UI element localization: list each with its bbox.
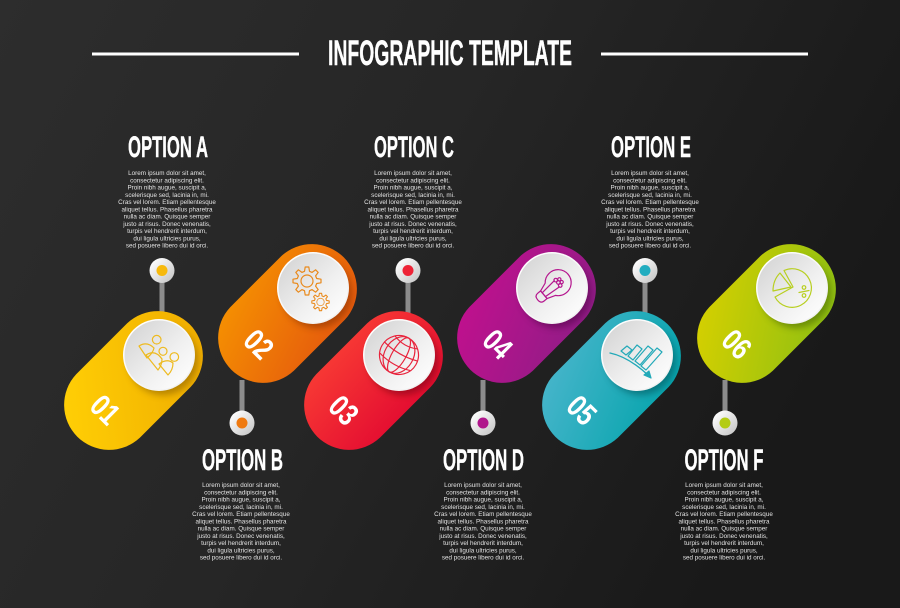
option B text: consectetur adipiscing elit.	[204, 489, 278, 496]
option A text: turpis vel hendrerit interdum,	[127, 228, 207, 235]
title rule right	[601, 52, 808, 56]
option B heading: OPTION B	[202, 444, 283, 477]
option A text: nulla ac diam. Quisque semper	[124, 214, 210, 220]
option D heading: OPTION D	[443, 444, 524, 477]
option D text: aliquet tellus. Phasellus pharetra	[437, 518, 529, 525]
option D text: scelerisque sed, lacinia in, mi.	[441, 504, 525, 511]
option E text: turpis vel hendrerit interdum,	[610, 228, 690, 235]
option B text: sed posuere libero dui id orci.	[200, 554, 282, 562]
option C text: turpis vel hendrerit interdum,	[373, 228, 453, 235]
option F text: Proin nibh augue, suscipit a,	[684, 496, 764, 504]
option A text: scelerisque sed, lacinia in, mi.	[125, 192, 209, 199]
option D text: dui ligula ultricies purus,	[449, 547, 517, 554]
capsule 02	[218, 244, 357, 383]
option F text: consectetur adipiscing elit.	[687, 489, 761, 496]
option B text: dui ligula ultricies purus,	[207, 547, 275, 554]
icon: people	[139, 335, 179, 375]
option A text: Cras vel lorem. Etiam pellentesque	[118, 199, 216, 206]
number 04: 04	[476, 322, 520, 367]
option A text: Proin nibh augue, suscipit a,	[127, 184, 207, 192]
icon: light bulb	[529, 264, 576, 310]
option C text: Cras vel lorem. Etiam pellentesque	[364, 199, 462, 206]
number 02: 02	[237, 322, 281, 366]
option F text: Cras vel lorem. Etiam pellentesque	[675, 511, 773, 518]
option C text: aliquet tellus. Phasellus pharetra	[367, 206, 459, 213]
option E text: nulla ac diam. Quisque semper	[607, 214, 693, 220]
option B text: justo at risus. Donec venenatis,	[196, 533, 285, 540]
option B text: Cras vel lorem. Etiam pellentesque	[192, 511, 290, 518]
capsule 03	[304, 311, 443, 450]
capsule 01	[64, 311, 203, 450]
option F text: Lorem ipsum dolor sit amet,	[685, 482, 763, 489]
option E text: dui ligula ultricies purus,	[616, 235, 684, 242]
option D text: justo at risus. Donec venenatis,	[438, 533, 527, 540]
option B text: nulla ac diam. Quisque semper	[198, 526, 284, 532]
option C text: Lorem ipsum dolor sit amet,	[374, 170, 452, 177]
option C text: sed posuere libero dui id orci.	[372, 242, 454, 250]
option C text: dui ligula ultricies purus,	[379, 235, 447, 242]
option F text: scelerisque sed, lacinia in, mi.	[682, 504, 766, 511]
icon: falling bar chart	[610, 345, 662, 378]
option A text: justo at risus. Donec venenatis,	[122, 221, 211, 228]
option E text: scelerisque sed, lacinia in, mi.	[608, 192, 692, 199]
option F text: nulla ac diam. Quisque semper	[681, 526, 767, 532]
option F text: justo at risus. Donec venenatis,	[679, 533, 768, 540]
capsule 06	[697, 244, 836, 383]
option C heading: OPTION C	[374, 131, 454, 164]
number 06: 06	[715, 322, 759, 366]
option D text: nulla ac diam. Quisque semper	[440, 526, 526, 532]
option E heading: OPTION E	[611, 131, 691, 164]
icon: pie chart	[773, 269, 811, 307]
option E text: sed posuere libero dui id orci.	[609, 242, 691, 250]
option E text: aliquet tellus. Phasellus pharetra	[604, 206, 696, 213]
option E text: justo at risus. Donec venenatis,	[605, 221, 694, 228]
option A text: consectetur adipiscing elit.	[130, 177, 204, 184]
option D text: Lorem ipsum dolor sit amet,	[444, 482, 522, 489]
option A text: aliquet tellus. Phasellus pharetra	[121, 206, 213, 213]
option E text: Proin nibh augue, suscipit a,	[610, 184, 690, 192]
option B text: turpis vel hendrerit interdum,	[201, 540, 281, 547]
option C text: Proin nibh augue, suscipit a,	[373, 184, 453, 192]
option F heading: OPTION F	[684, 444, 764, 477]
option C text: consectetur adipiscing elit.	[376, 177, 450, 184]
capsule 04	[457, 244, 596, 383]
option D text: sed posuere libero dui id orci.	[442, 554, 524, 562]
title: INFOGRAPHIC TEMPLATE	[328, 34, 572, 73]
option C text: scelerisque sed, lacinia in, mi.	[371, 192, 455, 199]
option F text: sed posuere libero dui id orci.	[683, 554, 765, 562]
option C text: justo at risus. Donec venenatis,	[368, 221, 457, 228]
option A text: sed posuere libero dui id orci.	[126, 242, 208, 250]
connector pin D	[470, 380, 496, 436]
number 05: 05	[560, 388, 604, 432]
icon: globe	[372, 328, 426, 382]
connector pin C	[396, 258, 420, 314]
option E text: consectetur adipiscing elit.	[613, 177, 687, 184]
title rule left	[92, 52, 299, 56]
option F text: dui ligula ultricies purus,	[690, 547, 758, 554]
connector pin F	[712, 380, 738, 436]
icon: gears	[293, 267, 329, 311]
option A text: dui ligula ultricies purus,	[133, 235, 201, 242]
option B text: Proin nibh augue, suscipit a,	[201, 496, 281, 504]
option F text: aliquet tellus. Phasellus pharetra	[678, 518, 770, 525]
option A heading: OPTION A	[128, 131, 208, 164]
option D text: turpis vel hendrerit interdum,	[443, 540, 523, 547]
option D text: Cras vel lorem. Etiam pellentesque	[434, 511, 532, 518]
option B text: aliquet tellus. Phasellus pharetra	[195, 518, 287, 525]
option C text: nulla ac diam. Quisque semper	[370, 214, 456, 220]
connector pin E	[632, 258, 658, 314]
option E text: Cras vel lorem. Etiam pellentesque	[601, 199, 699, 206]
connector pin A	[150, 258, 174, 314]
connector pin B	[230, 380, 254, 436]
option B text: Lorem ipsum dolor sit amet,	[202, 482, 280, 489]
number 03: 03	[322, 388, 366, 432]
capsule 05	[542, 311, 681, 450]
number 01: 01	[83, 388, 127, 432]
option D text: Proin nibh augue, suscipit a,	[443, 496, 523, 504]
option D text: consectetur adipiscing elit.	[446, 489, 520, 496]
option F text: turpis vel hendrerit interdum,	[684, 540, 764, 547]
option B text: scelerisque sed, lacinia in, mi.	[199, 504, 283, 511]
option A text: Lorem ipsum dolor sit amet,	[128, 170, 206, 177]
option E text: Lorem ipsum dolor sit amet,	[611, 170, 689, 177]
